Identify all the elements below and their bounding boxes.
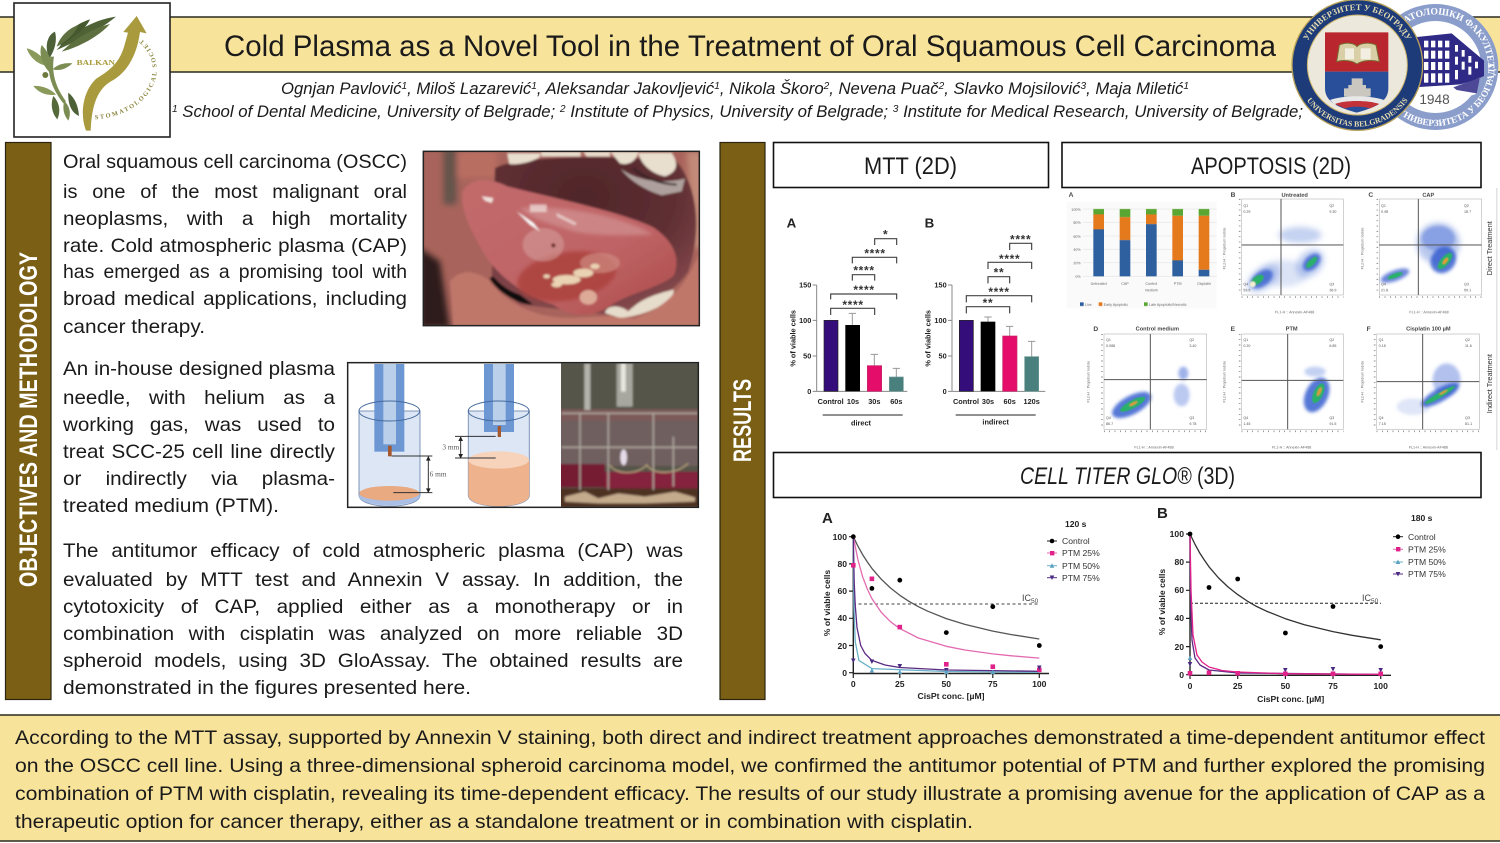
faculty ring lettering (1402, 8, 1496, 126)
line chart: 3D viability, 120 s (822, 510, 1100, 701)
fitted curves (853, 537, 1039, 672)
sidebar: results: RESULTS (729, 379, 757, 462)
data points (851, 534, 1042, 674)
conclusion text: According to the MTT assay, supported by Annexin V staining, both direct and indirect treatment approaches demonstrated a time-dependent antitumor effect (15, 727, 1486, 749)
flow plot: control medium: 86.7 (1106, 422, 1113, 426)
bar chart: MTT indirect: 60s (1004, 397, 1016, 406)
flow plot: untreated: Untreated (1281, 193, 1308, 199)
line chart: 3D viability, 180 s: 100 (1374, 681, 1388, 691)
text block: plasma needle (62, 358, 335, 517)
stacked bar chart: cell fractions: Control (1145, 282, 1157, 286)
bar chart: MTT direct: 30s (868, 397, 880, 406)
line chart: 3D viability, 180 s: 50 (1371, 598, 1379, 605)
authors: , Nikola Škoro (720, 79, 824, 98)
authors: 1 (1183, 81, 1189, 92)
significance brackets: **** (1010, 233, 1031, 247)
bar chart: MTT direct: 10s (847, 397, 859, 406)
legend: 120 s: Control (1062, 536, 1090, 546)
line chart: 3D viability, 180 s: 25 (1233, 681, 1243, 691)
authors: 3 (1080, 81, 1087, 92)
significance brackets: **** (999, 252, 1020, 266)
flow plot: CAP: 21.8 (1381, 288, 1388, 292)
bar chart: MTT indirect: B (925, 215, 935, 230)
line chart: 3D viability, 180 s: 60 (1174, 585, 1184, 595)
legend: 120 s: PTM 50% (1062, 561, 1100, 571)
icon: olive branch (27, 17, 116, 121)
text block: plasma needle: An in-house designed plasma (63, 358, 335, 380)
stacked bar chart: cell fractions: Untreated (1091, 282, 1107, 286)
flow plot: untreated: 36.9 (1329, 288, 1336, 292)
bars (959, 317, 1039, 391)
bar chart: MTT direct: A (787, 215, 797, 230)
flow plot: PTM: FL2-H :: Propidium Iodide (1223, 361, 1227, 403)
line chart: 3D viability, 180 s (1157, 505, 1446, 704)
chart legend: Early Apoptotic (1104, 303, 1128, 307)
stacked bar chart: cell fractions: 100% (1071, 208, 1081, 212)
significance brackets (831, 227, 897, 315)
significance brackets: ** (994, 266, 1004, 280)
line chart: 3D viability, 180 s: % of viable cells (1157, 569, 1167, 635)
flow plot: CAP: Q1 (1381, 204, 1386, 208)
chart legend: Late Apoptotic/Necrotic (1149, 303, 1187, 307)
bar chart: MTT indirect: indirect (982, 418, 1009, 427)
affiliations: 2 (559, 104, 566, 115)
bars (824, 313, 903, 391)
bar chart: MTT direct: 60s (890, 397, 902, 406)
flow plot: control medium: Q2 (1189, 338, 1194, 342)
flow plot: PTM: Q1 (1243, 338, 1248, 342)
flow plot: CAP (1360, 192, 1482, 314)
text block: plasma needle: treated medium (PTM). (63, 495, 279, 517)
authors: 2 (823, 81, 830, 92)
bar chart: MTT direct: 150 (799, 281, 811, 290)
legend: 180 s: PTM 25% (1408, 544, 1446, 554)
affiliations: Institute of Physics, University of Belgrade; (566, 103, 893, 121)
significance brackets: **** (988, 285, 1010, 299)
bar chart: MTT indirect (923, 215, 1045, 427)
stacked bar chart: cell fractions: PTM (1174, 282, 1182, 286)
significance brackets: **** (842, 298, 864, 312)
flow plot: PTM: 1.45 (1243, 422, 1250, 426)
affiliations: 1 (172, 104, 178, 115)
stacked bar chart: cell fractions: 40% (1073, 248, 1081, 252)
bar chart: MTT indirect: 30s (982, 397, 994, 406)
stacked bar chart: cell fractions: medium (1145, 288, 1158, 292)
flow plot: control medium: 3.40 (1189, 344, 1196, 348)
authors: 2 (938, 81, 945, 92)
authors: 1 (714, 81, 720, 92)
flow plot: control medium: 9.78 (1189, 422, 1196, 426)
flow plot: control medium: Q1 (1106, 338, 1111, 342)
line chart: 3D viability, 120 s: % of viable cells (822, 570, 832, 636)
line chart: 3D viability, 120 s: 100 (1032, 679, 1047, 689)
text block: plasma needle: or indirectly via plasma- (63, 468, 335, 490)
sidebar: objectives and methodology: OBJECTIVES AND METHODOLOGY (15, 252, 43, 587)
flow plot: CAP: 0.48 (1381, 210, 1388, 214)
line chart: 3D viability, 120 s: 40 (837, 613, 847, 623)
flow plot: untreated (1223, 192, 1343, 314)
heading: Cell Titer Glo (3D) (774, 452, 1481, 498)
crest: Faculty of Dental Medicine (1398, 4, 1498, 130)
flow plot: cisplatin: 11.6 (1465, 344, 1472, 348)
authors: , Maja Miletić (1086, 80, 1184, 98)
heading: apoptosis (2D): APOPTOSIS (2D) (1191, 153, 1351, 180)
flow plot: untreated: Q4 (1243, 282, 1248, 286)
bar chart: MTT indirect: Control (953, 397, 979, 406)
university ring lettering: УНИВЕРЗИТЕТ У БЕОГРАДУ (1302, 4, 1412, 40)
shield (1325, 32, 1388, 113)
lower lip and teeth (489, 276, 533, 305)
flow plot: CAP: FL2-H :: Propidium Iodide (1360, 227, 1364, 269)
significance brackets: **** (853, 264, 875, 278)
authors: , Miloš Lazarević (407, 80, 532, 98)
text block: assays: spheroid models, using 3D GloAssay. The obtained results are (63, 650, 683, 672)
stacked bar chart: cell fractions: 0% (1075, 275, 1081, 279)
text block: introduction: rate. Cold atmospheric plasma (CAP) (63, 235, 407, 257)
fitted curves (1190, 534, 1381, 674)
flow plot: PTM: 91.5 (1329, 422, 1336, 426)
line chart: 3D viability, 180 s: IC (1362, 593, 1371, 603)
text block: introduction: Oral squamous cell carcinoma (OSCC) (63, 151, 407, 173)
crest: University of Belgrade (1291, 0, 1424, 131)
upper teeth (507, 152, 685, 195)
stacked bar chart: cell fractions: CAP (1121, 282, 1129, 286)
conclusion text: therapeutic option for cancer therapy, either as a standalone treatment or in combination with cisplatin. (15, 811, 973, 833)
sidebar: objectives and methodology (6, 142, 51, 700)
flow plot: PTM: PTM (1286, 327, 1298, 333)
line chart: 3D viability, 120 s: 60 (837, 586, 847, 596)
flow plot: CAP: CAP (1422, 193, 1435, 199)
line chart: 3D viability, 120 s: 80 (837, 559, 847, 569)
line chart: 3D viability, 180 s: 50 (1281, 681, 1290, 691)
flow plot: control medium: FL1-H :: Annexin-AF488 (1134, 445, 1174, 449)
founding year: 1948 (1419, 92, 1450, 107)
flow plot: control medium: Q3 (1189, 416, 1194, 420)
bar chart: MTT indirect: 150 (934, 281, 947, 290)
label: 6 mm: 6 mm (430, 470, 447, 479)
line chart: 3D viability, 180 s: 80 (1174, 557, 1184, 567)
significance brackets: ** (983, 296, 993, 310)
text block: introduction: has emerged as a promising tool with (63, 261, 407, 283)
stacked bar chart: cell fractions: Cisplatin (1197, 282, 1211, 286)
bar chart: MTT indirect: % of viable cells (923, 310, 932, 367)
affiliations: School of Dental Medicine, University of Belgrade; (178, 103, 560, 121)
building (1413, 33, 1484, 87)
flow plot: control medium (1086, 326, 1207, 449)
stacked bar chart: cell fractions (1067, 192, 1217, 308)
line chart: 3D viability, 180 s: 40 (1174, 613, 1184, 623)
logo lettering (76, 40, 157, 120)
bar chart: MTT direct: 100 (799, 316, 811, 325)
flow plot: control medium: 0.088 (1106, 344, 1115, 348)
line chart: 3D viability, 120 s: 75 (988, 679, 998, 689)
significance brackets: **** (864, 246, 886, 260)
heading: MTT (2D) (774, 142, 1048, 188)
photo: oral lesion on tongue (420, 148, 703, 328)
heading: Cell Titer Glo (3D): CELL TITER GLO® (3D) (1020, 463, 1235, 490)
flow plot: control medium: Control medium (1136, 327, 1179, 333)
flow plot: CAP: 59.1 (1464, 288, 1471, 292)
bar chart: MTT direct: Control (818, 397, 844, 406)
line chart: 3D viability, 120 s: A (822, 510, 833, 527)
flow plot: untreated: Q2 (1329, 204, 1334, 208)
flow plot: cisplatin: Q3 (1465, 416, 1470, 420)
flow plot: CAP: 18.7 (1464, 210, 1471, 214)
flow plot: control medium: FL2-H :: Propidium Iodide (1086, 361, 1090, 403)
line chart: 3D viability, 120 s: IC (1022, 593, 1031, 603)
text block: assays: demonstrated in the figures presented here. (63, 677, 471, 699)
diagram: direct treatment (359, 364, 432, 506)
flow plot: PTM: 0.20 (1243, 344, 1250, 348)
authors: 1 (531, 81, 537, 92)
stacked bar chart: cell fractions: 80% (1073, 221, 1081, 225)
authors: , Slavko Mojsilović (944, 80, 1081, 98)
text block: introduction: cancer therapy. (63, 316, 205, 338)
icon: gold arrow (83, 16, 147, 131)
authors: , Nevena Puač (829, 80, 939, 98)
text block: introduction: neoplasms, with a high mortality (63, 208, 407, 230)
line chart: 3D viability, 120 s: CisPt conc. [µM] (917, 691, 985, 701)
line chart: 3D viability, 120 s: 50 (1031, 598, 1039, 605)
line chart: 3D viability, 180 s: 0 (1179, 670, 1184, 680)
flow plot: CAP: FL1-H :: Annexin-AF488 (1409, 310, 1449, 314)
figure: apoptosis panels (1067, 192, 1494, 449)
flow plot: untreated: Q1 (1243, 204, 1248, 208)
line chart: 3D viability, 180 s: 0 (1188, 681, 1193, 691)
line chart: 3D viability, 120 s: 0 (851, 679, 856, 689)
text block: assays: evaluated by MTT test and Annexin V assay. In addition, the (63, 569, 683, 591)
legend: 180 s: PTM 50% (1408, 557, 1446, 567)
text block: plasma needle: needle, with helium as a (63, 387, 335, 409)
flow plot: cisplatin: 81.1 (1465, 422, 1472, 426)
flow plot: cisplatin: F (1367, 326, 1371, 333)
bar chart: MTT indirect: 100 (934, 316, 947, 325)
legend: 120 s: 120 s (1065, 519, 1087, 529)
line chart: 3D viability, 120 s: 100 (833, 532, 847, 542)
bar chart: MTT direct: direct (851, 419, 872, 428)
flow plot: cisplatin: 7.15 (1379, 422, 1386, 426)
faculty ring lettering: УНИВЕРЗИТЕТА У БЕОГРАДУ (1402, 62, 1496, 126)
chart legend: Live (1085, 303, 1092, 307)
flow plot: CAP: Q2 (1464, 204, 1469, 208)
bar chart: MTT direct: 50 (803, 352, 811, 361)
legend: 180 s: Control (1408, 532, 1436, 542)
photo: plasma jet over well plate (558, 360, 702, 510)
affiliations: 3 (893, 104, 899, 115)
legend: 120 s: PTM 75% (1062, 573, 1100, 583)
title: Cold Plasma as a Novel Tool in the Treatment of Oral Squamous Cell Carcinoma (224, 30, 1276, 63)
legend: 180 s: 180 s (1411, 513, 1433, 523)
chart legend (1080, 302, 1187, 307)
flow plot: CAP: C (1368, 192, 1373, 199)
faculty ring lettering: СТОМАТОЛОШКИ ФАКУЛТЕТ (1404, 8, 1494, 68)
flow plot: PTM: 6.85 (1329, 344, 1336, 348)
line chart: 3D viability, 120 s: 20 (837, 641, 847, 651)
flow plot: PTM: Q4 (1243, 416, 1248, 420)
flow plot: cisplatin: 0.15 (1379, 344, 1386, 348)
flow plot: PTM: Q3 (1329, 416, 1334, 420)
flow plot: PTM: E (1231, 326, 1236, 333)
conclusion text: on the OSCC cell line. Using a three-dimensional spheroid carcinoma model, we confirmed the antitumor potential of PTM and further explored the promising (15, 755, 1485, 777)
university ring lettering: UNIVERSITAS BELGRADENSIS (1308, 97, 1408, 127)
figure: plasma needle setup (348, 360, 702, 510)
bar chart: MTT direct: % of viable cells (788, 310, 797, 367)
flow plot: untreated: 53.5 (1243, 288, 1250, 292)
flow plot: control medium: D (1093, 326, 1098, 333)
label: direct treatment: Direct Treatment (1485, 221, 1494, 275)
line chart: 3D viability, 120 s: 50 (942, 679, 951, 689)
text block: assays: cytotoxicity of CAP, applied either as a monotherapy or in (63, 596, 683, 618)
stacked bar chart: cell fractions: 20% (1073, 261, 1081, 265)
flow plot: untreated: B (1231, 192, 1236, 199)
significance brackets: * (883, 227, 888, 241)
text block: introduction (63, 151, 407, 338)
header title bar (0, 17, 1500, 72)
bar chart: MTT direct: 0 (807, 387, 811, 396)
flow plot: PTM: Q2 (1329, 338, 1334, 342)
legend: 120 s: PTM 25% (1062, 548, 1100, 558)
text block: assays: The antitumor efficacy of cold atmospheric plasma (CAP) was (63, 540, 683, 562)
conclusion panel (0, 715, 1500, 841)
flow plot: cisplatin: Q1 (1379, 338, 1384, 342)
flow plot: untreated: Q3 (1329, 282, 1334, 286)
mouth cavity (492, 157, 696, 315)
line chart: 3D viability, 180 s: 20 (1174, 642, 1184, 652)
logo: Balkan Stomatological Society (13, 2, 171, 138)
heading: apoptosis (2D) (1062, 142, 1481, 188)
tongue (462, 180, 676, 315)
bar chart: MTT direct (787, 215, 907, 428)
legend: 180 s (1393, 513, 1446, 579)
conclusion text: combination of PTM with cisplatin, revealing its time-dependent efficacy. The results of our study illustrate a promising avenue for the application of CAP as a (15, 783, 1485, 805)
lesion (482, 196, 620, 309)
label: 3 mm: 3 mm (442, 442, 460, 451)
line chart: 3D viability, 120 s: 0 (842, 668, 847, 678)
flow plot: cisplatin: Cisplatin 100 µM (1406, 327, 1451, 333)
sidebar: results (720, 142, 765, 700)
text block: plasma needle: working gas, was used to (62, 414, 335, 436)
text block: plasma needle: treat SCC-25 cell line directly (63, 441, 335, 463)
text block: introduction: broad medical applications, including (63, 288, 407, 310)
data points (1188, 532, 1383, 676)
significance brackets: **** (853, 283, 875, 297)
conclusion text (15, 727, 1486, 833)
bar chart: MTT indirect: 0 (943, 387, 947, 396)
flow plot: CAP: Q3 (1464, 282, 1469, 286)
university ring lettering (1302, 4, 1412, 127)
authors: Ognjan Pavlović (281, 80, 400, 98)
text block: assays: combination with cisplatin was analyzed on more reliable 3D (63, 623, 683, 645)
line chart: 3D viability, 180 s: 100 (1170, 529, 1184, 539)
authors: , Aleksandar Jakovljević (537, 80, 715, 98)
flow plot: CAP: Q4 (1381, 282, 1386, 286)
bar chart: MTT indirect: 120s (1024, 397, 1040, 406)
text block: assays (63, 540, 683, 699)
flow plot: cisplatin: FL1-H :: Annexin-AF488 (1409, 445, 1448, 449)
stacked bar chart: cell fractions: 60% (1073, 235, 1081, 239)
flow plot: cisplatin: FL2-H :: Propidium Iodide (1360, 361, 1364, 403)
legend: 180 s: PTM 75% (1408, 569, 1446, 579)
significance brackets (966, 233, 1032, 313)
line chart: 3D viability, 180 s: CisPt conc. [µM] (1257, 694, 1324, 704)
stacked bar chart: cell fractions: A (1069, 192, 1074, 199)
flow plot: untreated: FL1-H :: Annexin-AF488 (1275, 310, 1314, 314)
flow plot: untreated: FL2-H :: Propidium Iodide (1223, 227, 1227, 269)
flow plot: cisplatin: Q2 (1465, 338, 1470, 342)
flow plot: untreated: 0.29 (1243, 210, 1250, 214)
line chart: 3D viability, 180 s: B (1157, 505, 1168, 522)
affiliations: Institute for Medical Research, University of Belgrade; (898, 103, 1303, 121)
heading: MTT (2D): MTT (2D) (864, 153, 957, 180)
flow plot: control medium: Q4 (1106, 416, 1111, 420)
flow plot: untreated: 9.30 (1329, 210, 1336, 214)
flow plot: PTM (1223, 326, 1343, 449)
label: indirect treatment: Indirect Treatment (1485, 354, 1494, 413)
diagram: indirect treatment (455, 364, 529, 506)
legend: 120 s (1047, 519, 1100, 583)
bar chart: MTT indirect: 50 (939, 352, 947, 361)
line chart: 3D viability, 120 s: 25 (895, 679, 905, 689)
flow plot: PTM: FL1-H :: Annexin-AF488 (1272, 445, 1311, 449)
authors: 1 (401, 81, 407, 92)
flow plot: cisplatin (1360, 326, 1479, 449)
text block: introduction: is one of the most malignant oral (63, 181, 407, 203)
line chart: 3D viability, 180 s: 75 (1328, 681, 1338, 691)
flow plot: cisplatin: Q4 (1379, 416, 1384, 420)
logo lettering: BALKAN (77, 58, 116, 67)
